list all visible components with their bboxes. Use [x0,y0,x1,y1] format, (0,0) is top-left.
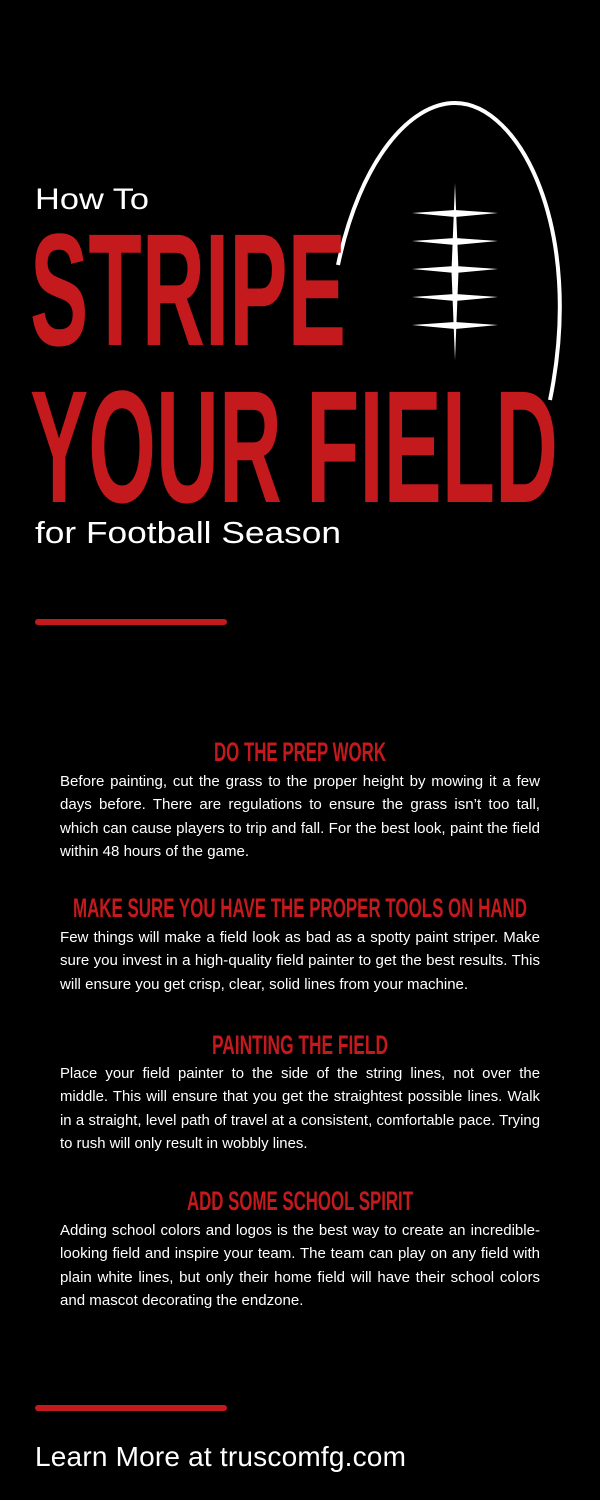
title: How To: How To [35,183,149,216]
body text: Place your field painter to the side of the string lines, not over the middle. This will ensure that you get the straightest possible lines. Walk in a straight, level path of travel at a consistent, comfortable pace. Trying to rush will only result in wobbly lines. [60,1066,540,1152]
section: tools [60,894,540,993]
section: prep work [60,738,540,860]
header graphic: football and title [30,101,562,550]
icon: football outline arc [338,103,560,400]
divider bar top [35,619,227,625]
footer: learn more: Learn More at truscomfg.com [35,1441,406,1472]
body text: Few things will make a field look as bad as a spotty paint striper. Make sure you invest in a high-quality field painter to get the best results. This will ensure you get crisp, clear, solid lines from your machine. [60,929,540,993]
subtitle: for Football Season [35,515,341,550]
body text: Before painting, cut the grass to the proper height by mowing it a few days before. There are regulations to ensure the grass isn’t too tall, which can cause players to trip and fall. For the best look, paint the field within 48 hours of the game. [60,773,540,860]
section: school spirit [60,1187,540,1309]
section: painting [60,1031,540,1152]
icon: football laces [412,183,498,360]
title: STRIPE: STRIPE [30,200,346,379]
divider bar bottom [35,1405,227,1411]
body text: Adding school colors and logos is the best way to create an incredible-looking field and inspire your team. The team can play on any field with plain white lines, but only their home field will have their school colors and mascot decorating the endzone. [60,1222,540,1309]
